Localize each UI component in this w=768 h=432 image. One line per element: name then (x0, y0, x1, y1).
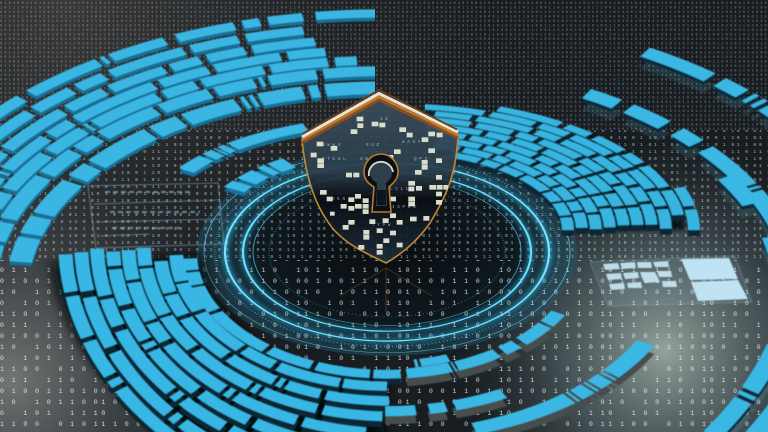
blue arcs in front of the shield, left side (180, 122, 309, 197)
shield pixel squares (311, 117, 448, 255)
central dark disk with glow (197, 148, 577, 356)
shield letters: Y T G U L (322, 157, 346, 162)
shield reflection (340, 268, 432, 312)
shield letters: Q P S (414, 157, 428, 162)
shield letters: T Y P W (372, 223, 391, 228)
shield body (302, 96, 458, 263)
shield letters: D E N (332, 197, 346, 202)
shield letters: H W W V (322, 143, 341, 148)
HUD panel left (88, 183, 224, 248)
shield letters: I Z (380, 117, 388, 122)
shield letters: I S P O U (392, 205, 416, 210)
shield with keyhole (302, 90, 458, 263)
shield top band (302, 90, 458, 143)
shield letters: R U Z (366, 143, 380, 148)
shield letters: Z W W T U (360, 157, 384, 162)
concentric holographic rings (204, 159, 570, 353)
keyhole (364, 154, 398, 212)
HUD panel right: data tiles (590, 256, 752, 306)
shield letters: W A S Y (402, 140, 421, 145)
blue arcs: bottom-right tail (384, 310, 654, 432)
shield letters: L C L L (390, 187, 409, 192)
shield letters (322, 117, 428, 228)
blue segmented arcs: upper-right cluster (425, 103, 701, 237)
